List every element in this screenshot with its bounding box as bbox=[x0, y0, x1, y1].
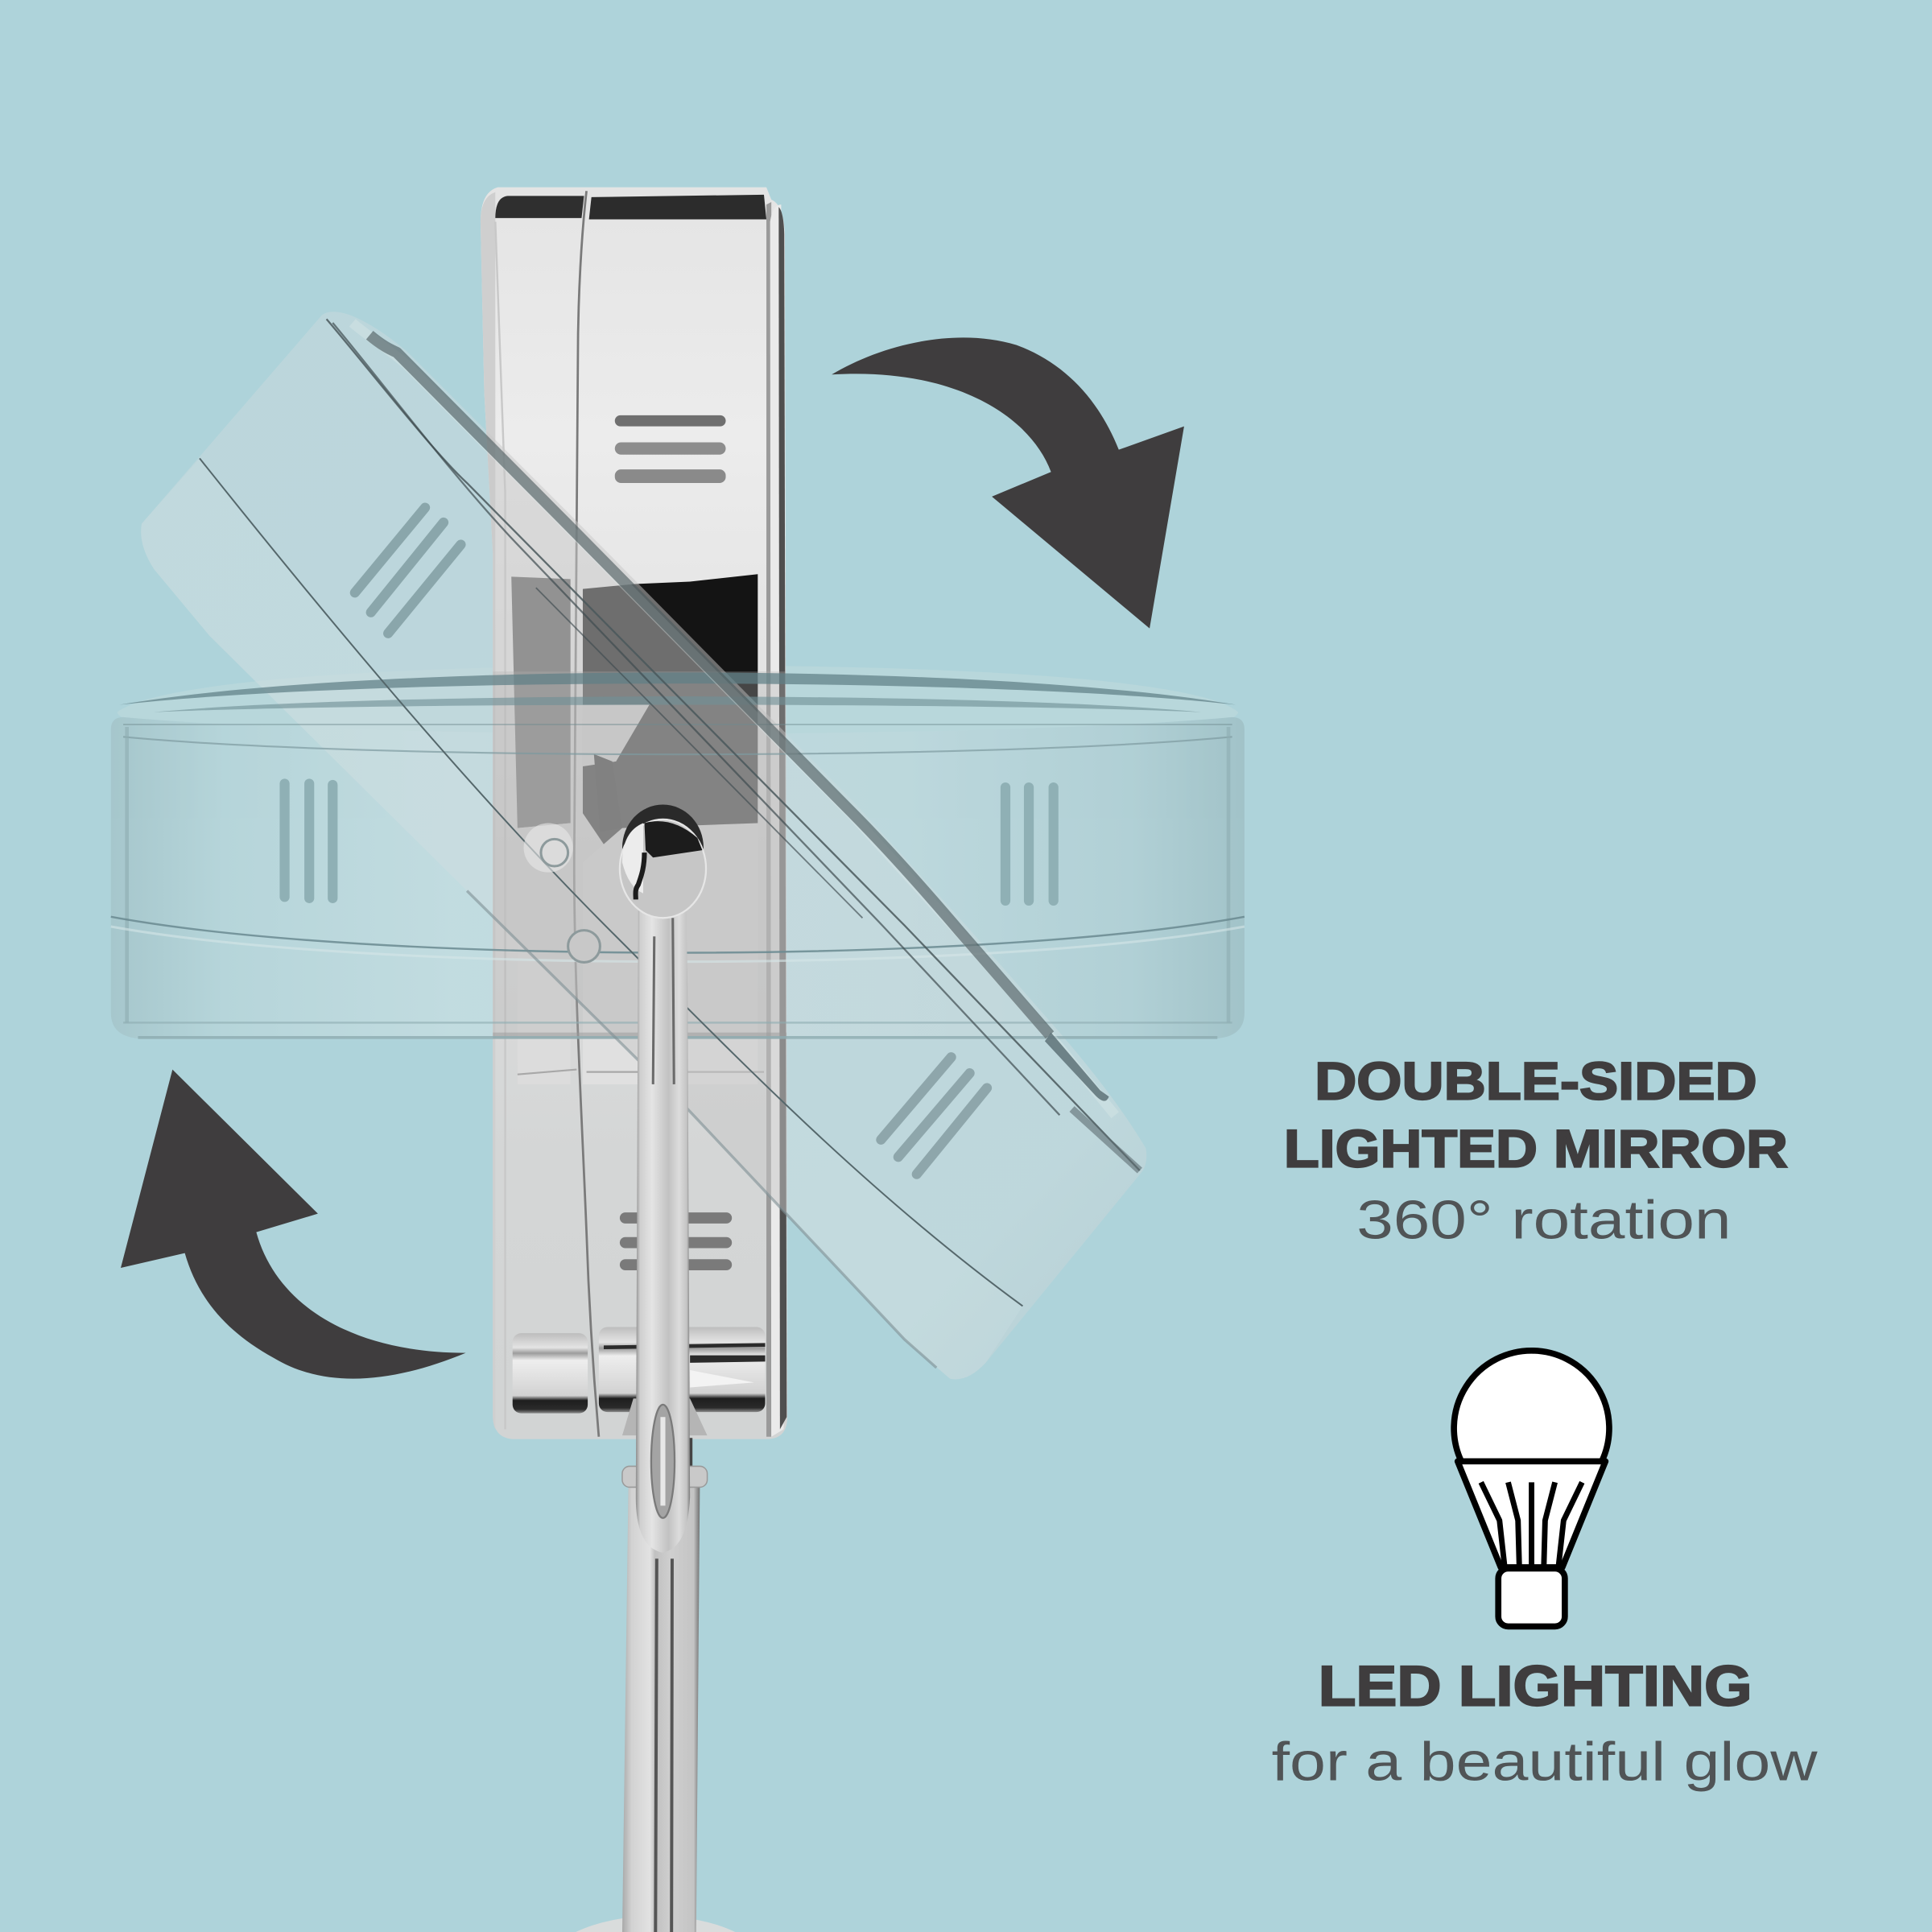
upper vents bbox=[355, 508, 460, 634]
bottom hinge right bbox=[599, 1327, 766, 1412]
lower vents bbox=[620, 1212, 732, 1270]
ghost vents: horizontal mirror left bbox=[279, 778, 337, 903]
icon: LED bulb bbox=[1454, 1351, 1609, 1626]
rim light band bbox=[353, 323, 1115, 1115]
stand: curved arm with knob bbox=[620, 804, 706, 1553]
upper vents bbox=[615, 415, 726, 483]
mirror body bbox=[481, 188, 787, 1439]
infographic canvas bbox=[111, 187, 1818, 1932]
seam bbox=[200, 458, 1022, 1306]
rim slug bbox=[1045, 1033, 1109, 1101]
subheading: for a beautiful glow: for a beautiful glow bbox=[1272, 1732, 1818, 1793]
side lines bbox=[127, 727, 1228, 1022]
thin rod bbox=[687, 1438, 692, 1470]
knob cap bbox=[622, 804, 704, 891]
knob left highlight bbox=[622, 823, 643, 894]
ghost mirror details: horizontal bbox=[111, 672, 1245, 1038]
rotation arrow: bottom left bbox=[121, 1070, 466, 1379]
heading: double-sided lighted mirror bbox=[1284, 1051, 1788, 1178]
knob dark patch bbox=[645, 821, 702, 857]
horizontal bottom line bbox=[493, 1032, 786, 1036]
dark reflection: left block bbox=[511, 576, 571, 828]
ghost vents: horizontal mirror right bbox=[1001, 782, 1059, 906]
subheading: 360 rotation: 360° rotation bbox=[1356, 1190, 1732, 1250]
collar bbox=[622, 1466, 708, 1487]
heading: double-sided lighted mirror: LIGHTED MIRROR bbox=[1284, 1118, 1788, 1178]
stand base bbox=[542, 1916, 769, 1932]
reflection: wedge bbox=[594, 754, 622, 832]
bulb dome bbox=[1454, 1351, 1609, 1461]
seam bbox=[574, 191, 599, 1437]
lower vents bbox=[881, 1057, 987, 1174]
bulb base bbox=[1498, 1568, 1565, 1626]
bulb neck bbox=[1458, 1461, 1605, 1567]
lower edge line bbox=[467, 891, 936, 1368]
lighter lower strip bbox=[141, 458, 1022, 1379]
lower chrome panel lines bbox=[518, 1070, 764, 1075]
arm lower loop bbox=[651, 1405, 675, 1518]
ghost tint over chrome bbox=[493, 440, 787, 1214]
dark reflection: right block bbox=[583, 574, 758, 862]
rotation arrow: top right bbox=[832, 337, 1184, 629]
right edge strip bbox=[766, 202, 771, 1437]
arm highlights bbox=[653, 918, 674, 1084]
hinge connector bbox=[622, 1398, 708, 1435]
bottom lines bbox=[123, 1022, 1232, 1023]
arm bbox=[636, 906, 690, 1553]
ghost mirror fill: horizontal position bbox=[111, 666, 1245, 1038]
knob wavy line bbox=[636, 852, 645, 899]
rim top band bbox=[119, 672, 1236, 705]
rim dark band bbox=[369, 335, 1050, 1035]
ghost mirror details: diagonal bbox=[200, 319, 1140, 1368]
stand: lower post bbox=[622, 1438, 708, 1932]
hinge disc bbox=[524, 823, 573, 873]
rim end shadow bbox=[1072, 1109, 1140, 1170]
top dark band left bbox=[495, 196, 584, 218]
reflection: pale lower bbox=[583, 823, 758, 1084]
vertical mirror: chrome side view bbox=[481, 188, 787, 1439]
left rim bbox=[481, 192, 495, 1430]
bottom hinge left bbox=[513, 1333, 588, 1414]
rim second band bbox=[154, 696, 1201, 712]
ghost mirror fill: diagonal position bbox=[141, 312, 1146, 1379]
rim inner line bbox=[123, 737, 1232, 754]
seam bbox=[111, 917, 1245, 953]
rim thin lines bbox=[327, 319, 1140, 1170]
screws bbox=[541, 839, 568, 866]
top dark band right bbox=[589, 195, 766, 219]
knob bbox=[620, 819, 706, 918]
heading: double-sided lighted mirror: DOUBLE-SIDED bbox=[1315, 1051, 1757, 1110]
diagonal tint bbox=[495, 440, 786, 1214]
reflection: light patch bbox=[583, 705, 650, 766]
post dark lines bbox=[655, 1558, 672, 1932]
hinge right reflection bbox=[604, 1343, 766, 1363]
heading: LED lighting: LED LIGHTING bbox=[1319, 1653, 1752, 1717]
bulb fins bbox=[1481, 1482, 1582, 1565]
horizontal tint bbox=[474, 671, 795, 1038]
